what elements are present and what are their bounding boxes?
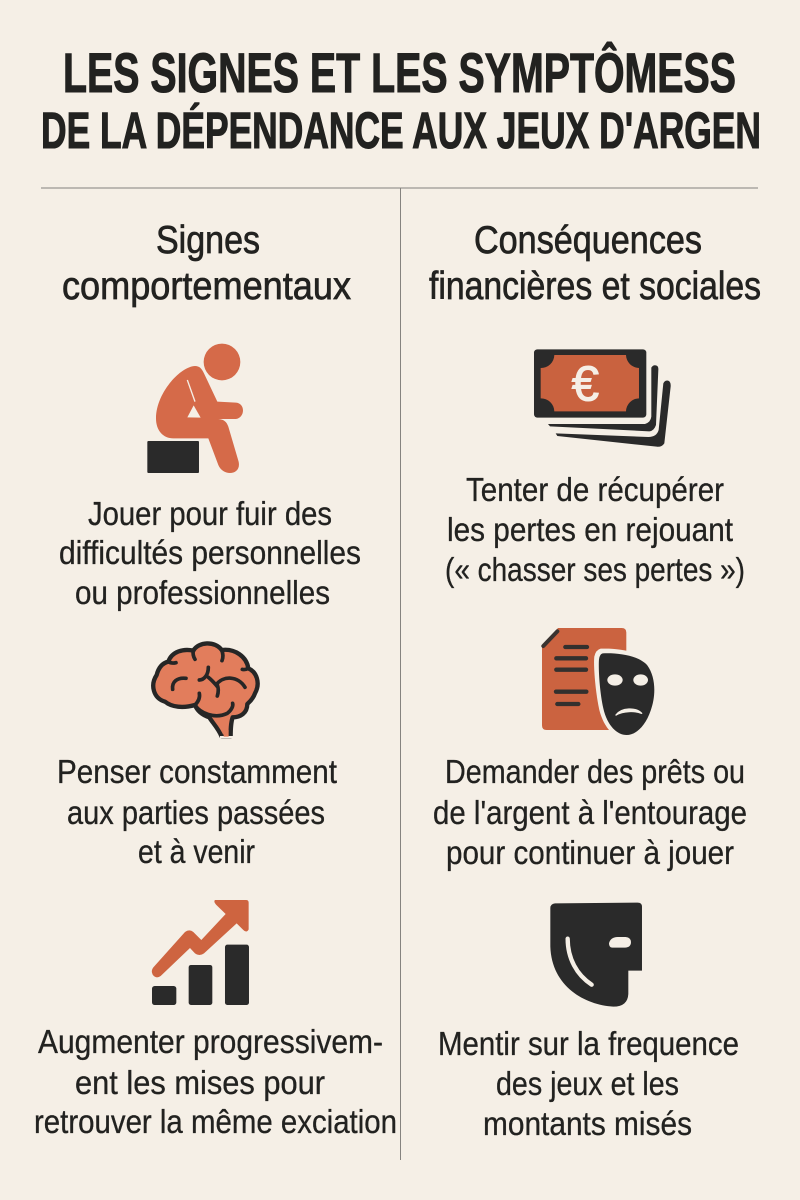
icon: half mask [550,903,642,1007]
icon: seated person [147,344,243,473]
text: penser constamment: Penser constamment [57,753,337,790]
text: fuir des difficultés [59,495,361,611]
text: penser constamment: et à venir [138,833,255,870]
icon: rising arrow and bars [152,900,249,1005]
text: demander des prêts: pour continuer à jouer [446,834,734,871]
text: mentir sur la fréquence: Mentir sur la frequence [438,1025,739,1062]
text: penser constamment: aux parties passées [67,794,325,831]
text: fuir des difficultés: Jouer pour fuir des [88,495,332,532]
text: demander des prêts [433,753,747,871]
icon: euro banknotes: € [572,356,599,411]
icon: euro banknotes [534,349,671,447]
text: chasser ses pertes [445,471,745,588]
text: augmenter les mises: retrouver la même exciation [34,1103,397,1140]
text: penser constamment [57,753,337,870]
text: augmenter les mises: ent les mises pour [75,1064,325,1101]
text: augmenter les mises: Augmenter progressivem- [38,1023,383,1060]
heading: signes comportementaux: comportementaux [62,265,351,308]
text: augmenter les mises [34,1023,397,1140]
icon: document and sad mask [542,628,659,739]
text: mentir sur la fréquence: des jeux et les [496,1065,679,1102]
text: mentir sur la fréquence [438,1025,739,1142]
text: chasser ses pertes: (« chasser ses pertes ») [445,551,745,588]
heading: conséquences financières et sociales: Conséquences [474,219,702,262]
text: fuir des difficultés: difficultés personnelles [59,534,361,571]
text: demander des prêts: Demander des prêts ou [445,753,745,790]
text: mentir sur la fréquence: montants misés [483,1105,692,1142]
text: chasser ses pertes: les pertes en rejouant [447,511,733,548]
text: demander des prêts: de l'argent à l'entourage [433,794,747,831]
heading: conséquences financières et sociales [429,219,761,308]
text: fuir des difficultés: ou professionnelles [75,574,330,611]
text: chasser ses pertes: Tenter de récupérer [466,471,724,508]
icon: brain [153,643,258,739]
title [41,41,761,159]
heading: signes comportementaux: Signes [156,219,260,262]
heading: signes comportementaux [62,219,351,308]
